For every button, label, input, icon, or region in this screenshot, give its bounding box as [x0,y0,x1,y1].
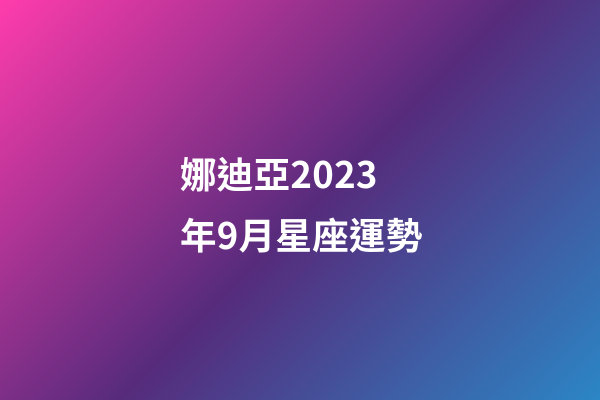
title: 年9月星座運勢 [180,206,423,260]
title [180,146,423,260]
title: 娜迪亞2023 [180,146,378,198]
